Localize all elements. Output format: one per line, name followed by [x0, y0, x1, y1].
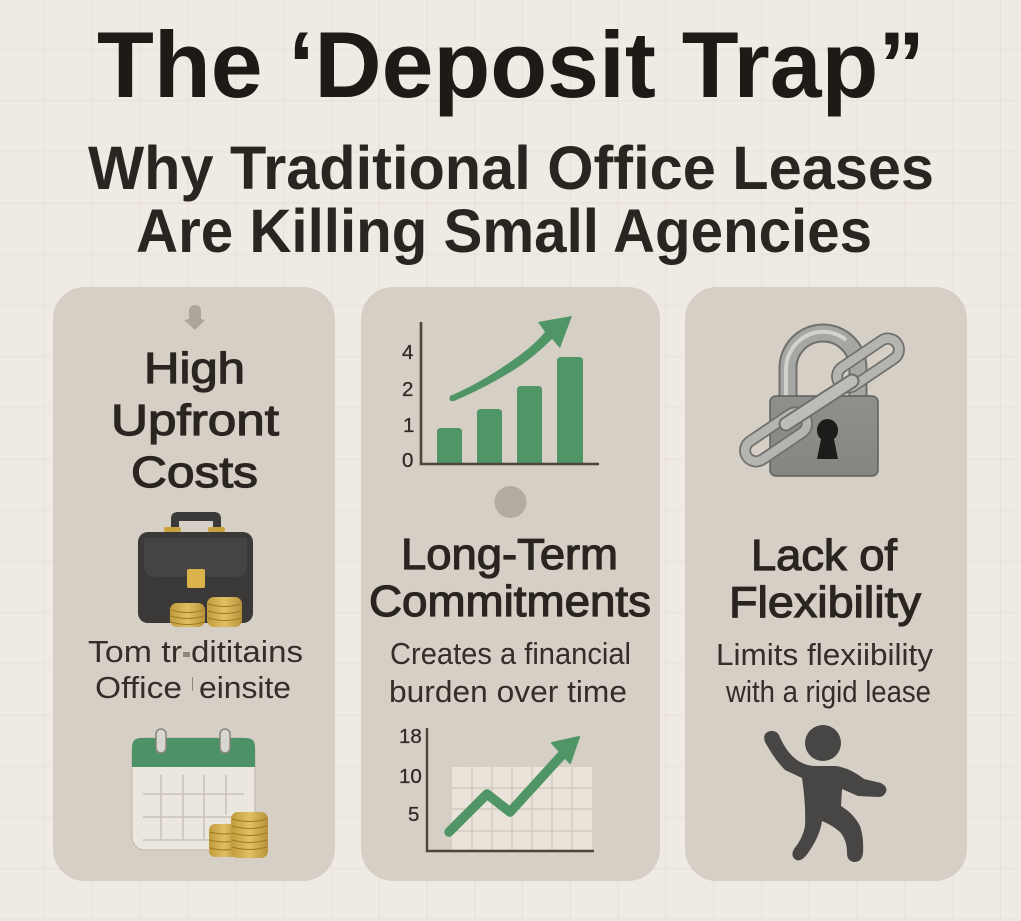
- body text: burden over time: [389, 674, 627, 709]
- body text: Creates a financial: [390, 636, 631, 671]
- arrow: zigzag trend: [449, 755, 562, 832]
- icon: small down arrow: [184, 305, 205, 330]
- bar chart: 0: [402, 449, 413, 472]
- panel: high upfront costs: [53, 287, 335, 881]
- panel: long-term commitments: [361, 287, 660, 881]
- body text: dititains: [191, 634, 303, 669]
- heading: long-term commitments: Commitments: [369, 577, 651, 626]
- body text: [88, 634, 303, 705]
- body text: [389, 636, 631, 709]
- line chart: 10: [399, 765, 422, 788]
- heading: lack of flexibility: Lack of: [751, 531, 898, 580]
- line chart: 5: [408, 803, 419, 826]
- panel: lack of flexibility: [685, 287, 967, 881]
- body text: Tom tr: [88, 634, 182, 669]
- bar chart: [402, 316, 599, 472]
- bar chart: 1: [403, 414, 414, 437]
- bar chart: 2: [402, 378, 413, 401]
- subtitle: Are Killing Small Agencies: [136, 197, 872, 265]
- heading: high upfront costs: [111, 344, 279, 497]
- body text: with a rigid lease: [725, 674, 931, 709]
- icon: grey dot: [494, 486, 526, 518]
- body text: Office: [95, 670, 182, 705]
- heading: high upfront costs: High: [144, 344, 245, 393]
- body text: [716, 637, 933, 709]
- title: The ‘Deposit Trap”: [97, 12, 925, 117]
- icon: briefcase with coins: [138, 512, 253, 627]
- heading: high upfront costs: Upfront: [111, 396, 279, 445]
- body text: einsite: [199, 670, 291, 705]
- icon: calendar with coins: [132, 729, 268, 858]
- line chart: 18: [399, 725, 422, 748]
- subtitle: [88, 134, 934, 265]
- heading: lack of flexibility: [729, 531, 921, 627]
- subtitle: Why Traditional Office Leases: [88, 134, 934, 202]
- heading: lack of flexibility: Flexibility: [729, 578, 921, 627]
- arrow: rising trend: [450, 316, 572, 401]
- heading: high upfront costs: Costs: [131, 448, 258, 497]
- bar chart: 4: [402, 341, 413, 364]
- line chart: [399, 725, 594, 851]
- heading: long-term commitments: Long-Term: [401, 530, 618, 579]
- icon: padlock with chain: [741, 332, 903, 476]
- heading: long-term commitments: [369, 530, 651, 626]
- icon: moving person: [764, 725, 886, 862]
- body text: Limits flexiibility: [716, 637, 933, 672]
